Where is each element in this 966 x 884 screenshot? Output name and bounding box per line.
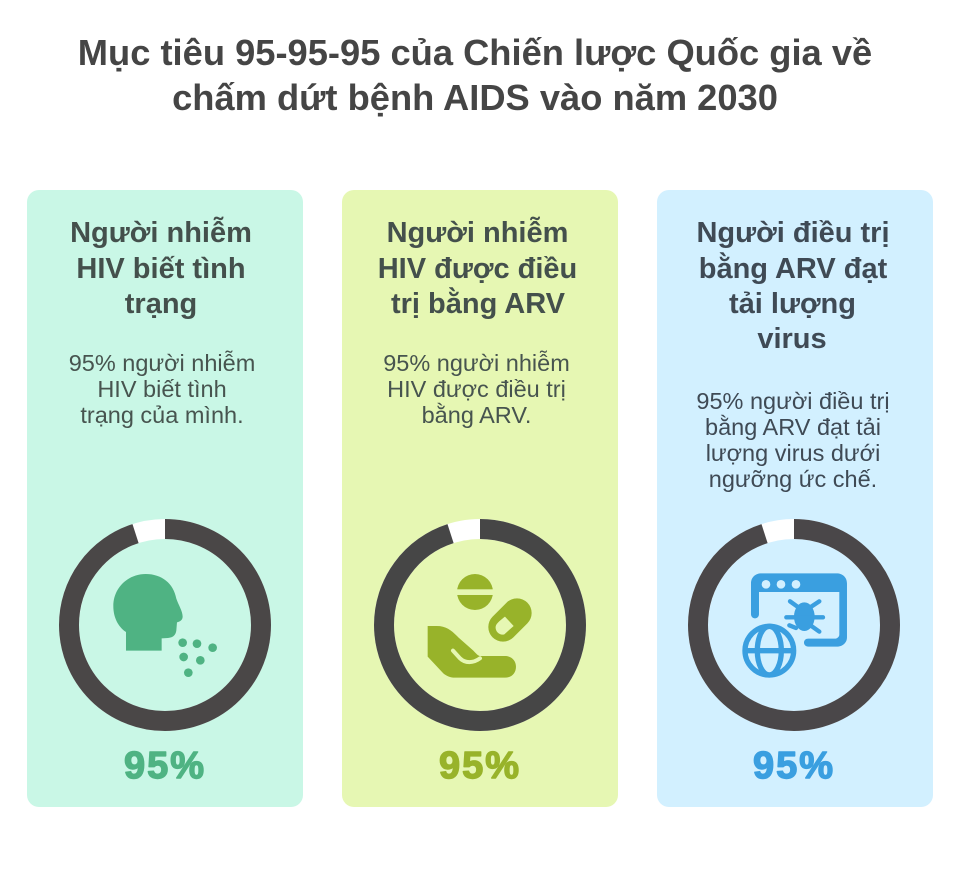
- heading: viral suppression: bằng ARV đạt: [699, 251, 888, 285]
- heading: viral suppression: virus: [757, 323, 827, 355]
- value: 95%: 95%: [753, 745, 835, 787]
- donut chart: 95 percent: [698, 529, 890, 721]
- value: 95%: 95%: [124, 745, 206, 787]
- text block: viral suppression: bằng ARV đạt tải: [705, 414, 881, 440]
- text block: treated: [383, 350, 570, 428]
- title: [78, 32, 872, 118]
- value: 95%: 95%: [439, 745, 521, 787]
- text block: viral suppression: [696, 388, 890, 492]
- heading: treated: [378, 215, 577, 320]
- heading: treated: Người nhiễm: [387, 215, 568, 249]
- text block: viral suppression: lượng virus dưới: [706, 440, 880, 466]
- text block: treated: 95% người nhiễm: [383, 350, 570, 376]
- icon: browser with bug and globe: [741, 573, 847, 679]
- donut chart: 95 percent: [384, 529, 576, 721]
- panel: people who know their status: [27, 190, 303, 807]
- title: chấm dứt bệnh AIDS vào năm 2030: [172, 77, 778, 118]
- heading: viral suppression: Người điều trị: [696, 217, 890, 249]
- heading: know status: HIV biết tình: [76, 253, 246, 285]
- heading: know status: [70, 215, 252, 320]
- title: Mục tiêu 95-95-95 của Chiến lược Quốc gia về: [78, 32, 872, 73]
- text block: know status: HIV biết tình: [97, 376, 227, 402]
- heading: know status: Người nhiễm: [70, 215, 252, 249]
- heading: know status: trạng: [125, 288, 197, 320]
- icon: hand with pills: [428, 574, 517, 678]
- panel: people treated with ARV: [342, 190, 618, 807]
- text block: know status: [69, 350, 255, 428]
- heading: viral suppression: tải lượng: [729, 288, 856, 320]
- heading: treated: trị bằng ARV: [391, 286, 566, 320]
- text block: viral suppression: 95% người điều trị: [696, 388, 890, 414]
- text block: treated: bằng ARV.: [422, 402, 531, 428]
- text block: viral suppression: ngưỡng ức chế.: [709, 466, 877, 492]
- text block: know status: trạng của mình.: [80, 402, 244, 428]
- donut chart: 95 percent: [69, 529, 261, 721]
- heading: viral suppression: [696, 217, 890, 355]
- panel: treated reaching viral suppression: [657, 190, 933, 807]
- text block: treated: HIV được điều trị: [387, 376, 566, 402]
- icon: head with droplets: [113, 574, 217, 677]
- text block: know status: 95% người nhiễm: [69, 350, 255, 376]
- heading: treated: HIV được điều: [378, 253, 577, 285]
